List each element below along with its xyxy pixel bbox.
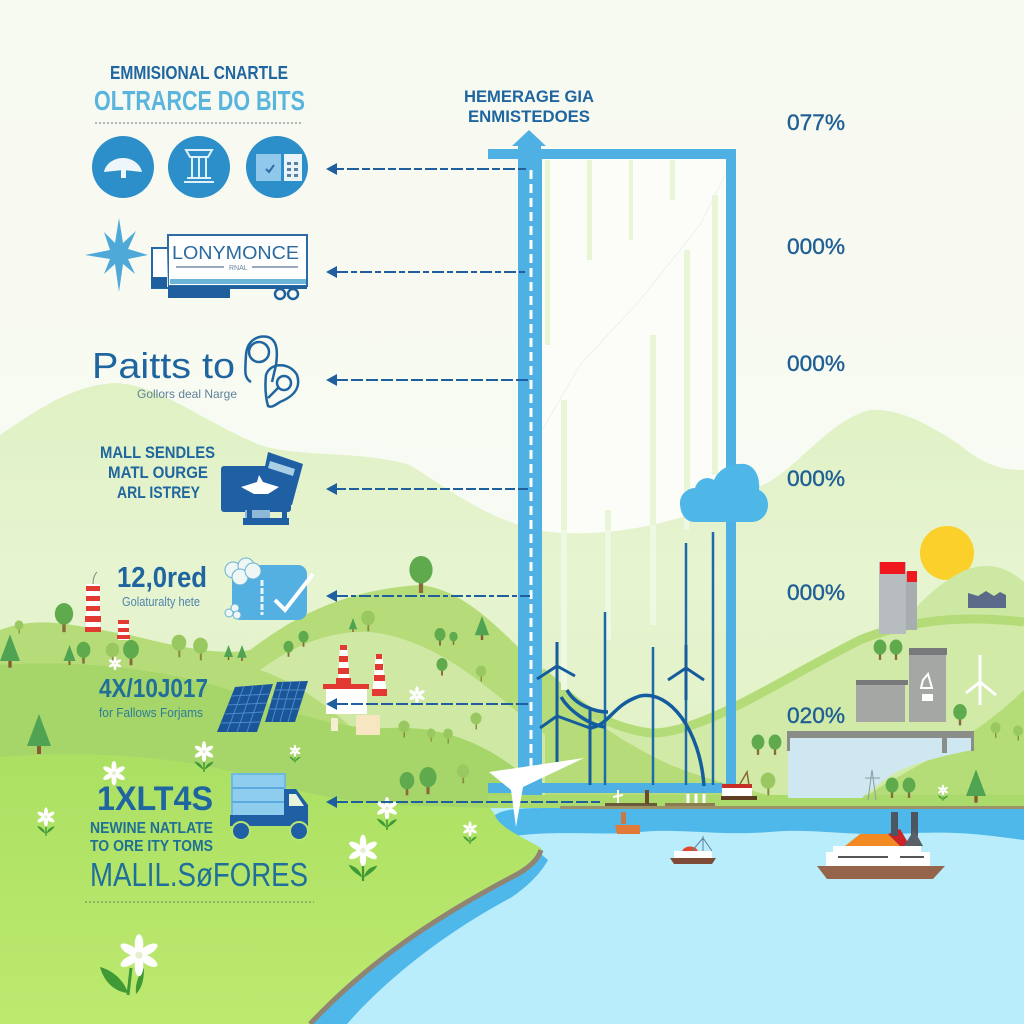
- dashed arrows: [326, 163, 600, 808]
- chart panel interior: [541, 158, 727, 558]
- top bar: [488, 149, 736, 159]
- power plant right: [856, 562, 947, 722]
- text block: Paitts to: [92, 345, 237, 401]
- text block: 1XLT4S: 1XLT4S: [97, 780, 213, 818]
- white wind turbine: [966, 655, 996, 705]
- percent labels: 000%: [787, 580, 845, 605]
- lime foreground land: [0, 754, 541, 1024]
- up arrow: [512, 130, 546, 152]
- big flower: [100, 934, 159, 995]
- trees on far hills: [0, 556, 489, 795]
- power arc: [561, 690, 704, 786]
- text block: 1XLT4S: TO ORE ITY TOMS: [90, 838, 213, 855]
- icon: solar panels: [217, 681, 308, 732]
- text block: 1XLT4S: MALIL.SøFORES: [90, 856, 308, 893]
- icon: delivery truck: LONYMONCE: [172, 243, 299, 263]
- poles and turbines: [537, 532, 713, 786]
- right bar: [726, 150, 736, 790]
- shoreline top: [560, 806, 1024, 809]
- title: EMMISIONAL CNARTLE: [110, 63, 288, 83]
- text block: 1XLT4S: NEWINE NATLATE: [90, 820, 213, 837]
- text block: Mall Sendles: MALL SENDLES: [100, 443, 215, 462]
- paper plane: [489, 758, 584, 827]
- title: [94, 63, 305, 116]
- chart heading: [464, 87, 594, 126]
- icon: checkmark box: [225, 558, 313, 620]
- icon: red-striped chimneys left: [85, 572, 130, 640]
- pale vertical lines over hill: [561, 490, 689, 690]
- pale vertical lines: [545, 160, 718, 532]
- icon: monitor: [221, 452, 303, 525]
- meadow ridge band: [541, 619, 1024, 733]
- text block: 12,0red: Golaturalty hete: [122, 594, 200, 609]
- text block: 4X/10J017: [99, 673, 208, 720]
- text block: Mall Sendles: [100, 443, 215, 502]
- percent labels: 020%: [787, 703, 845, 728]
- far pale hills: [0, 383, 1024, 1024]
- small ship: [670, 836, 716, 864]
- icon: delivery truck: [151, 235, 307, 299]
- text block: 4X/10J017: for Fallows Forjams: [99, 705, 203, 720]
- left mid hill: [0, 585, 800, 806]
- percent labels: 000%: [787, 466, 845, 491]
- flowers: [37, 656, 477, 995]
- icon row: three circles: [92, 136, 308, 198]
- text block: 12,0red: 12,0red: [117, 562, 207, 594]
- right lower green: [850, 690, 1024, 830]
- right meadow: [541, 620, 1024, 830]
- right trees: [752, 640, 1023, 795]
- sun: [920, 526, 974, 580]
- bottom bar: [488, 783, 722, 793]
- icon: delivery truck: RNAL: [229, 265, 248, 272]
- percent labels: [787, 110, 845, 728]
- text block: Paitts to: Gollors deal Narge: [137, 387, 237, 401]
- text block: 12,0red: [117, 562, 207, 609]
- trees beside reservoir: [886, 769, 986, 803]
- text block: Paitts to: Paitts to: [92, 345, 235, 386]
- large ferry: [817, 812, 945, 879]
- hill with house, far right: [720, 566, 1024, 820]
- left bar: [518, 150, 542, 795]
- icon: abstract loop: [245, 337, 298, 407]
- water light: [300, 808, 1024, 1024]
- chart heading: ENMISTEDOES: [468, 107, 590, 126]
- small red barge: [721, 772, 757, 800]
- chart heading: HEMERAGE GIA: [464, 87, 594, 106]
- main chart frame: [488, 130, 736, 795]
- inner pale hill: [260, 632, 545, 800]
- icon: compass star: [85, 218, 148, 292]
- percent labels: 077%: [787, 110, 845, 135]
- right lower ground: [488, 795, 1024, 809]
- text block: Mall Sendles: ARL ISTREY: [117, 483, 201, 502]
- text block: 1XLT4S: [90, 780, 308, 893]
- text block: 4X/10J017: 4X/10J017: [99, 673, 208, 703]
- water strip dark: [492, 808, 1024, 840]
- water strip along the shore: [300, 845, 548, 1024]
- title: OLTRARCE DO BITS: [94, 85, 305, 116]
- percent labels: 000%: [787, 234, 845, 259]
- icon: cargo truck: [230, 774, 308, 840]
- reservoir and dam: [787, 731, 974, 800]
- cloud: [680, 464, 768, 522]
- small orange boat: [615, 812, 640, 834]
- text block: Mall Sendles: MATL OURGE: [108, 463, 208, 482]
- icon: factory with chimneys: [323, 645, 387, 735]
- percent labels: 000%: [787, 351, 845, 376]
- small bridge items: [605, 790, 715, 806]
- mid green band: [0, 663, 540, 815]
- shoreline brown: [310, 850, 541, 1024]
